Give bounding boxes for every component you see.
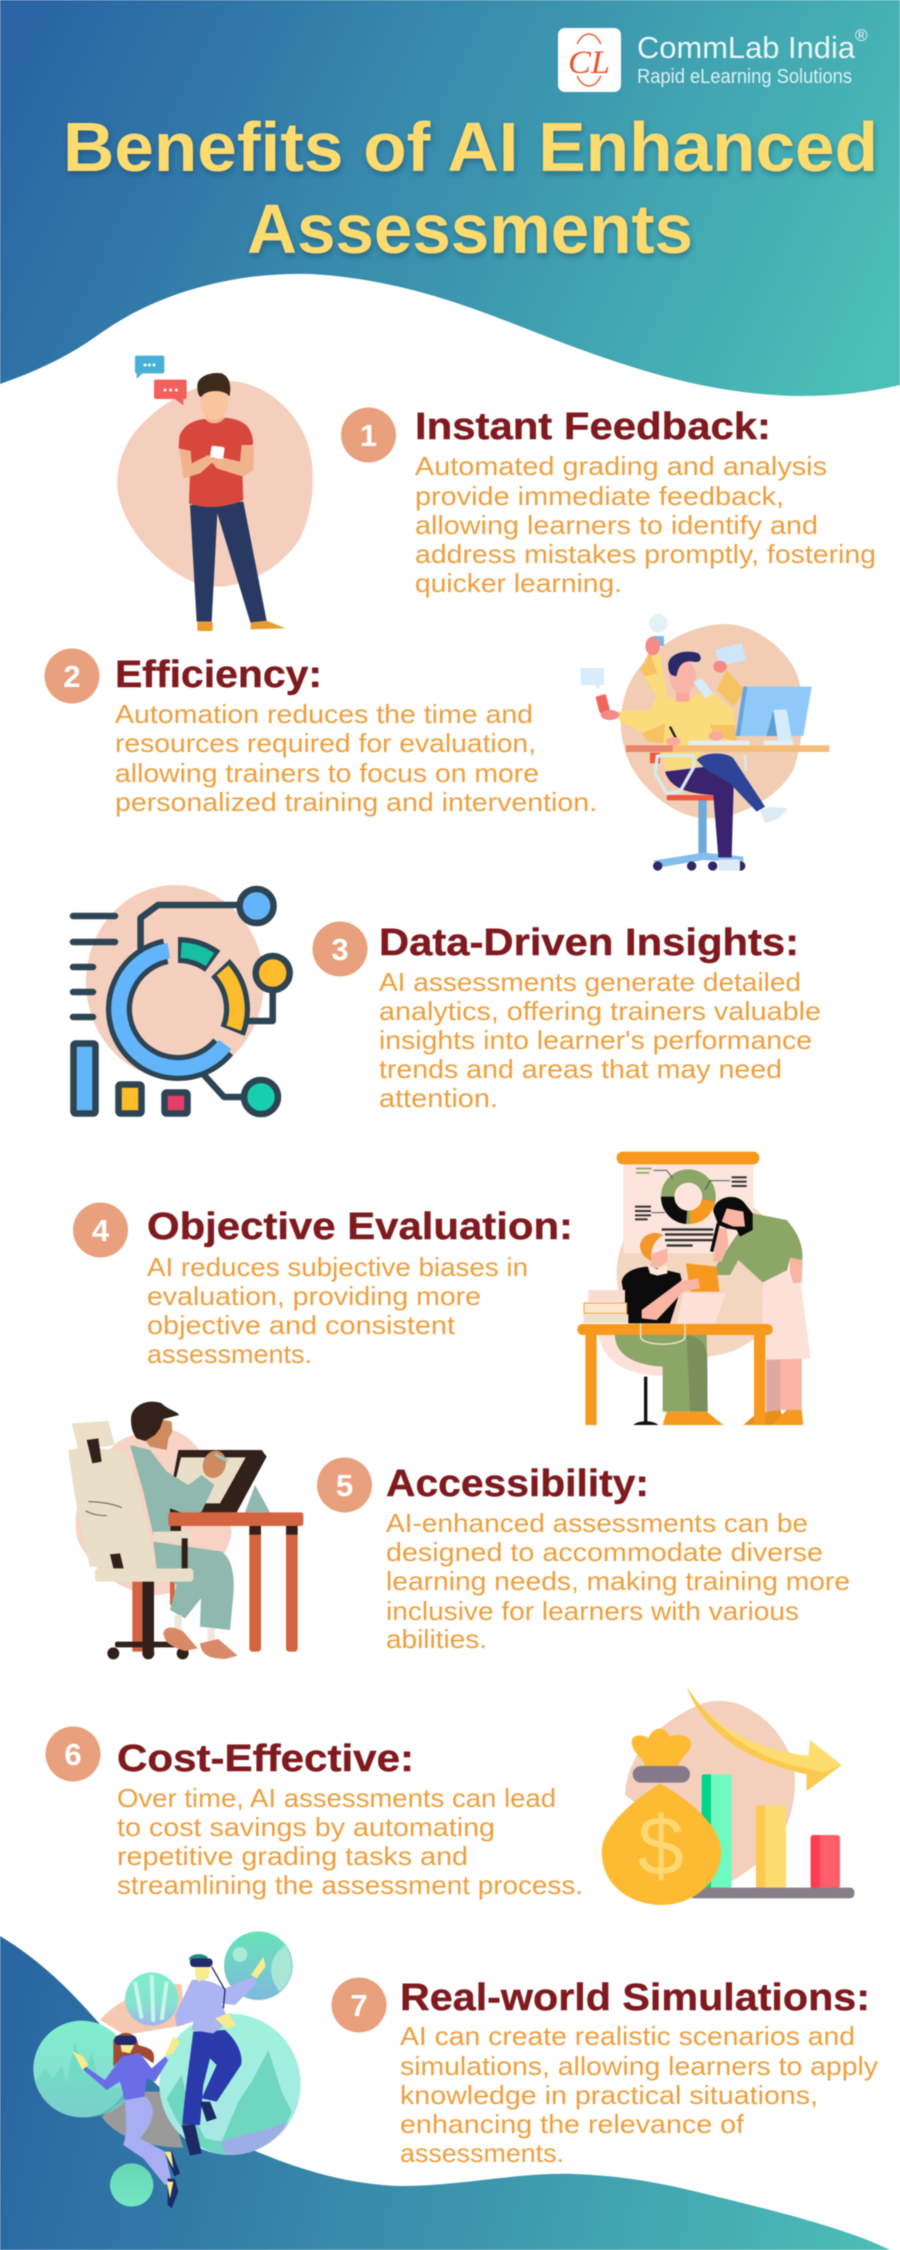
icon: two people in VR headsets [33, 1931, 301, 2208]
logo mark: CL [568, 45, 610, 81]
text: efficiency [115, 699, 597, 817]
text: accessibility: AI-enhanced assessments can be [386, 1508, 808, 1538]
title: Benefits of AI Enhanced [63, 108, 878, 186]
text: objective evaluation [147, 1252, 528, 1369]
number 3: 3 [331, 932, 349, 967]
title [63, 108, 878, 268]
text: objective evaluation: assessments. [147, 1339, 312, 1369]
text: cost-effective: Over time, AI assessments can lead [117, 1783, 556, 1813]
icon: person with phone [117, 356, 313, 631]
icon: money bag and falling bars [602, 1687, 854, 1905]
number 6: 6 [64, 1737, 82, 1772]
logo name: CommLab India [637, 30, 856, 65]
icon: man drawing on a tablet [68, 1402, 303, 1659]
text: instant feedback: quicker learning. [415, 568, 622, 598]
text: instant feedback [415, 451, 876, 598]
text: objective evaluation: objective and consistent [147, 1310, 456, 1340]
number 5: 5 [336, 1468, 353, 1503]
text: real-world simulations: simulations, allowing learners to apply [400, 2051, 878, 2081]
panel: 6 cost-effective [46, 1687, 854, 1905]
icon: donut chart and bars [73, 885, 290, 1114]
text: data-driven insights [379, 967, 821, 1113]
logo tagline: Rapid eLearning Solutions [637, 66, 852, 88]
text: cost-effective: to cost savings by automating [117, 1812, 495, 1842]
text: instant feedback: address mistakes promptly, fostering [415, 539, 876, 569]
number 3 [312, 922, 368, 976]
number 1 [341, 408, 396, 462]
text: real-world simulations: assessments. [400, 2138, 564, 2168]
text: instant feedback: Automated grading and analysis [415, 451, 827, 481]
text: efficiency: resources required for evaluation, [115, 728, 536, 758]
text: real-world simulations: enhancing the relevance of [400, 2109, 745, 2139]
text: accessibility [386, 1508, 850, 1654]
icon: two people reviewing a chart [577, 1152, 811, 1425]
title: Assessments [247, 190, 693, 268]
number 4: 4 [92, 1213, 110, 1248]
text: real-world simulations [400, 2021, 878, 2168]
number 7: 7 [350, 1988, 368, 2023]
text: data-driven insights: attention. [379, 1083, 498, 1113]
logo mark [558, 28, 621, 92]
text: accessibility: abilities. [386, 1624, 487, 1654]
text: real-world simulations: AI can create realistic scenarios and [400, 2021, 855, 2051]
panel: 3 data-driven insights [73, 885, 821, 1114]
footer wave background [0, 1936, 890, 2250]
text: data-driven insights: analytics, offering trainers valuable [379, 996, 821, 1026]
number 4 [73, 1202, 128, 1258]
text: accessibility: learning needs, making training more [386, 1566, 850, 1596]
text: cost-effective: streamlining the assessment process. [117, 1870, 583, 1900]
panel: 7 real-world simulations [33, 1931, 878, 2208]
heading: instant feedback: Instant Feedback: [415, 406, 771, 448]
number 1: 1 [360, 418, 377, 453]
text: data-driven insights: trends and areas that may need [379, 1054, 782, 1084]
text: efficiency: Automation reduces the time and [115, 699, 533, 729]
text: real-world simulations: knowledge in practical situations, [400, 2080, 818, 2110]
number 6 [46, 1726, 100, 1782]
heading: accessibility: Accessibility: [386, 1463, 649, 1505]
number 2: 2 [63, 659, 81, 694]
text: accessibility: designed to accommodate diverse [386, 1537, 823, 1567]
heading: cost-effective: Cost-Effective: [117, 1738, 414, 1780]
text: instant feedback: allowing learners to identify and [415, 510, 818, 540]
panel: 5 accessibility [68, 1402, 850, 1659]
text: cost-effective: repetitive grading tasks and [117, 1841, 468, 1871]
icon: money bag and falling bars: $ [637, 1799, 684, 1892]
panel: 1 instant feedback [117, 356, 876, 631]
text: data-driven insights: AI assessments generate detailed [379, 967, 801, 997]
registered mark: ® [855, 26, 868, 45]
text: efficiency: allowing trainers to focus on more [115, 758, 539, 788]
text: objective evaluation: AI reduces subjective biases in [147, 1252, 528, 1282]
heading: real-world simulations: Real-world Simulations: [400, 1977, 870, 2019]
text: accessibility: inclusive for learners with various [386, 1596, 799, 1626]
heading: objective evaluation: Objective Evaluation: [147, 1206, 573, 1248]
number 7 [332, 1978, 386, 2032]
text: instant feedback: provide immediate feedback, [415, 481, 784, 511]
heading: data-driven insights: Data-Driven Insights: [379, 922, 799, 964]
panel: 4 objective evaluation [73, 1152, 811, 1425]
panel: 2 efficiency [44, 614, 829, 871]
heading: efficiency: Efficiency: [115, 654, 322, 696]
number 2 [44, 648, 100, 704]
icon: multitasking man at desk [581, 614, 829, 871]
text: cost-effective [117, 1783, 583, 1900]
text: efficiency: personalized training and intervention. [115, 787, 597, 817]
number 5 [317, 1458, 372, 1512]
logo: CommLab India [558, 26, 868, 92]
header wave background [0, 0, 900, 396]
text: data-driven insights: insights into learner's performance [379, 1025, 812, 1055]
text: objective evaluation: evaluation, providing more [147, 1281, 481, 1311]
